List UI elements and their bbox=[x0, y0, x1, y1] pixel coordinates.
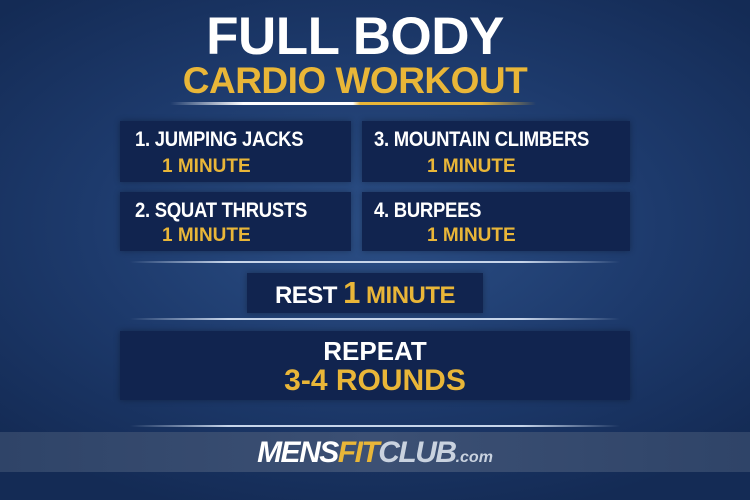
panel: jumping jacks bbox=[120, 121, 351, 182]
panel: jumping jacks: 1. JUMPING JACKS bbox=[135, 128, 303, 151]
rest box bbox=[247, 273, 483, 313]
repeat box bbox=[120, 331, 630, 400]
footer logo band: MENSFITCLUB.com bbox=[257, 436, 493, 469]
panel: mountain climbers: 3. MOUNTAIN CLIMBERS bbox=[374, 128, 589, 151]
panel: squat thrusts: 2. SQUAT THRUSTS bbox=[135, 199, 307, 222]
panel: squat thrusts bbox=[120, 192, 351, 251]
title: FULL BODY bbox=[206, 7, 504, 66]
title underline bbox=[170, 102, 536, 105]
panel: mountain climbers: 1 MINUTE bbox=[427, 156, 516, 177]
panel: burpees: 1 MINUTE bbox=[427, 225, 516, 246]
subtitle: CARDIO WORKOUT bbox=[183, 60, 527, 101]
repeat box: 3-4 ROUNDS bbox=[284, 364, 466, 397]
rest box: REST 1 MINUTE bbox=[275, 275, 455, 310]
panel: mountain climbers bbox=[362, 121, 630, 182]
footer logo band bbox=[0, 432, 750, 472]
panel: jumping jacks: 1 MINUTE bbox=[162, 156, 251, 177]
panel: squat thrusts: 1 MINUTE bbox=[162, 225, 251, 246]
repeat box: REPEAT bbox=[323, 336, 427, 366]
panel: burpees: 4. BURPEES bbox=[374, 199, 481, 222]
panel: burpees bbox=[362, 192, 630, 251]
